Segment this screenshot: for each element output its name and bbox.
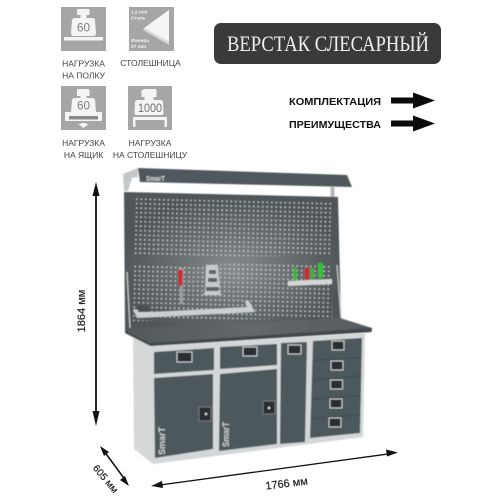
label: shelf load: НАГРУЗКА: [62, 58, 105, 68]
dimension: width: [151, 450, 398, 493]
door left: [154, 374, 213, 458]
dimension: height: 1864 мм: [76, 290, 88, 332]
cabinet side: [133, 337, 153, 464]
dimension: depth: 605 мм: [90, 463, 120, 496]
long shelf: [133, 301, 255, 318]
hanging rack: [203, 265, 222, 295]
icon: worktop: 27 mm: [131, 44, 146, 50]
canopy lamp: [138, 168, 352, 187]
canopy supports: [123, 168, 334, 198]
icon: worktop: Сталь: [131, 16, 146, 22]
worktop: [125, 318, 372, 346]
dimension: depth: [90, 446, 129, 496]
label: worktop load: НАГРУЗКА: [129, 138, 172, 148]
icon: worktop load 1000: 1000: [138, 103, 162, 115]
label: worktop load: НА СТОЛЕШНИЦУ: [113, 150, 188, 160]
drawer middle: [220, 344, 277, 369]
canopy lamp: SmarT: [146, 176, 166, 183]
door middle: [219, 369, 277, 451]
label: worktop: СТОЛЕШНИЦА: [120, 58, 181, 68]
title: [214, 23, 441, 64]
workbench illustration: [123, 168, 372, 464]
link: advantages: ПРЕИМУЩЕСТВА: [289, 119, 381, 131]
icon: worktop: [129, 7, 174, 51]
dimension: height: [76, 182, 100, 426]
panel side braces: [127, 265, 341, 328]
icon: worktop: 1.2 mm: [131, 10, 148, 16]
tool holder: [178, 268, 184, 304]
narrow door: [280, 342, 307, 444]
drawer left: [154, 348, 214, 374]
label: shelf load: НА ПОЛКУ: [62, 70, 106, 80]
cabinet front: [152, 333, 365, 464]
door left: SmarT: [157, 427, 167, 455]
link: advantages: [289, 116, 435, 132]
icon: shelf load 60: [61, 7, 106, 51]
dimension: width: 1766 мм: [265, 475, 309, 493]
icon: shelf load 60: 60: [77, 20, 90, 34]
icon: worktop: Фанера: [131, 38, 149, 44]
icon: worktop load 1000: [128, 86, 172, 130]
door middle: SmarT: [221, 422, 231, 447]
icon: drawer load 60: 60: [77, 98, 90, 112]
shelf block: [138, 306, 150, 312]
link: kit: КОМПЛЕКТАЦИЯ: [289, 96, 381, 108]
title: ВЕРСТАК СЛЕСАРНЫЙ: [227, 31, 429, 56]
small shelf with bins: [288, 279, 332, 286]
link: kit: [289, 92, 435, 108]
icon: drawer load 60: [61, 86, 106, 130]
label: drawer load: НА ЯЩИК: [64, 150, 103, 160]
label: drawer load: НАГРУЗКА: [62, 138, 105, 148]
perforated panel: [124, 192, 341, 333]
drawer column: [310, 338, 362, 438]
